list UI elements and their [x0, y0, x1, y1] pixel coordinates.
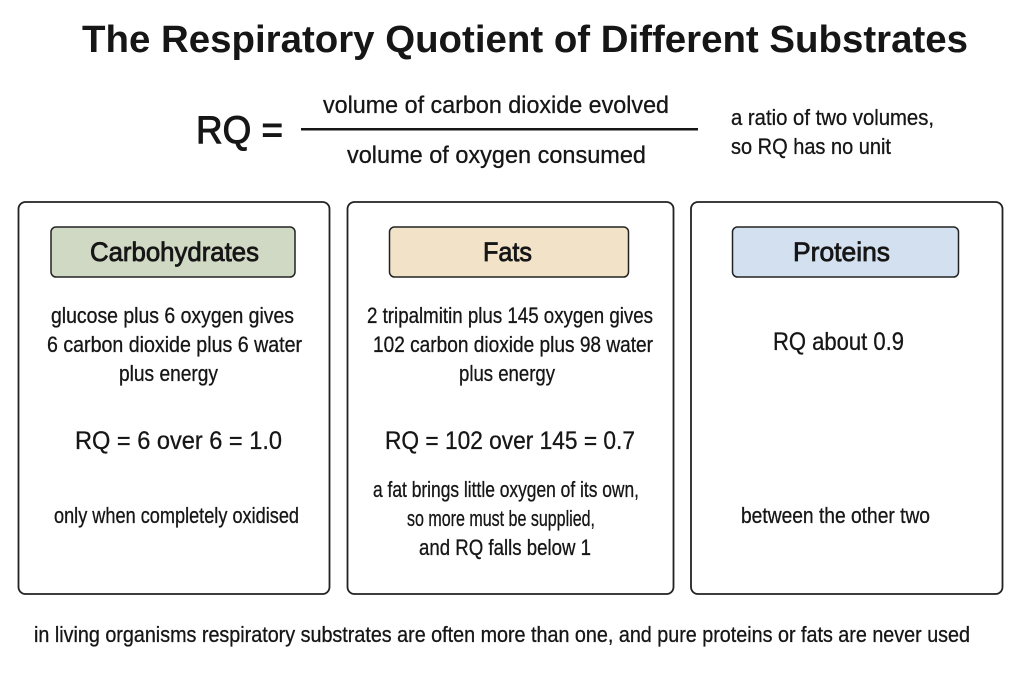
- title: The Respiratory Quotient of Different Substrates: [82, 19, 968, 61]
- RQ formula: volume of oxygen consumed: [347, 142, 646, 169]
- RQ formula: RQ =: [196, 109, 283, 152]
- fat equation: 102 carbon dioxide plus 98 water: [373, 332, 653, 357]
- protein RQ value: RQ about 0.9: [773, 328, 904, 356]
- fat equation: 2 tripalmitin plus 145 oxygen gives: [367, 303, 653, 328]
- fat equation: plus energy: [459, 361, 555, 386]
- fat note: a fat brings little oxygen of its own,: [373, 477, 639, 502]
- heading: carbohydrates: [51, 227, 295, 277]
- fat note: and RQ falls below 1: [419, 535, 591, 560]
- heading: carbohydrates: Carbohydrates: [90, 237, 259, 267]
- formula note: a ratio of two volumes,: [731, 105, 934, 130]
- formula note: [731, 105, 934, 159]
- fat note: [373, 477, 639, 560]
- formula note: so RQ has no unit: [731, 134, 891, 159]
- panel: proteins: [691, 202, 1002, 594]
- heading: fats: [390, 227, 628, 277]
- panel: fats: [348, 202, 674, 594]
- fat RQ value: RQ = 102 over 145 = 0.7: [385, 427, 635, 455]
- protein note: between the other two: [741, 503, 930, 528]
- fat equation: [367, 303, 653, 386]
- RQ formula: [196, 92, 698, 169]
- carbohydrate equation: glucose plus 6 oxygen gives: [51, 303, 294, 328]
- heading: fats: Fats: [483, 237, 532, 267]
- RQ formula: volume of carbon dioxide evolved: [323, 92, 669, 119]
- heading: proteins: [732, 227, 958, 277]
- carbohydrate RQ value: RQ = 6 over 6 = 1.0: [75, 427, 282, 455]
- panel: carbohydrates: [18, 202, 330, 594]
- carbohydrate equation: [47, 303, 302, 386]
- carbohydrate note: only when completely oxidised: [54, 503, 299, 528]
- fat note: so more must be supplied,: [407, 506, 595, 531]
- carbohydrate equation: plus energy: [119, 361, 218, 386]
- carbohydrate equation: 6 carbon dioxide plus 6 water: [47, 332, 302, 357]
- heading: proteins: Proteins: [793, 237, 890, 267]
